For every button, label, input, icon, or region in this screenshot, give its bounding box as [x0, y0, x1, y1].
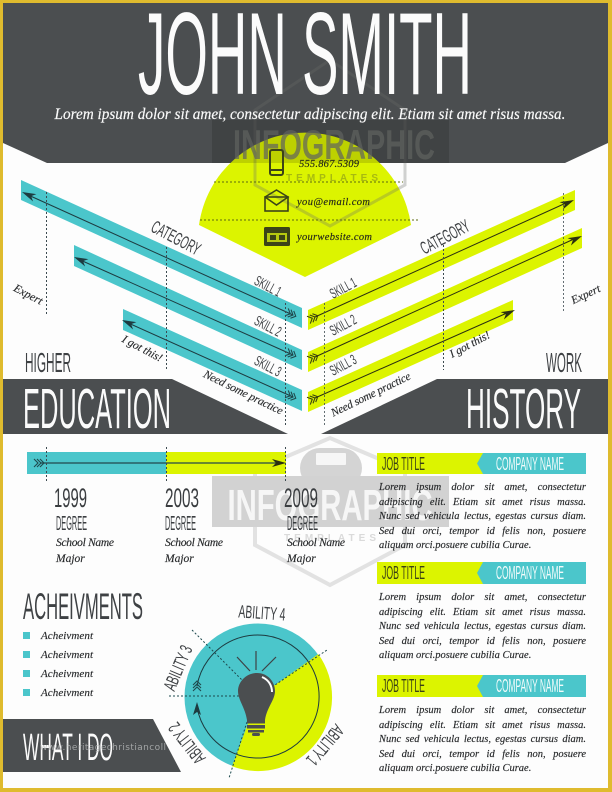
achievements list: Acheivment	[40, 649, 94, 661]
bar: skill 1	[20, 180, 302, 328]
timeline entry: 1999: Major	[55, 553, 85, 565]
timeline entry: 2009: DEGREE	[287, 513, 318, 535]
job description 3: aliquam orci.posuere cubilia Curae.	[379, 763, 531, 774]
timeline entry: 2003	[164, 483, 223, 565]
source url overlay: www.heritagechristiancoll	[40, 743, 166, 753]
label: need some practice: Need some practice	[200, 368, 285, 417]
job description 2: Nunc sed vehicula lectus, egestas cursus diam.	[379, 621, 586, 632]
bar: skill 3	[120, 309, 302, 411]
chart: education skills	[11, 180, 302, 427]
label: ability 4: ABILITY 4	[238, 601, 286, 625]
job description 3: Sed dui orci, tempor id felis non, posuere	[379, 748, 586, 760]
chart: work skills	[307, 190, 603, 425]
band: what i do	[3, 719, 181, 772]
contact details	[200, 150, 418, 246]
job header 2	[377, 562, 586, 584]
header band	[3, 3, 608, 163]
email: you@email.com	[296, 197, 370, 208]
watermark: top	[212, 60, 449, 226]
text: WHAT I DO	[23, 727, 113, 769]
timeline entry: 2009	[284, 483, 345, 565]
job description 1: Nunc sed vehicula lectus, egestas cursus diam.	[379, 511, 586, 522]
job description 3: Lorem ipsum dolor sit amet, consectetur	[379, 705, 586, 716]
job header 1	[377, 453, 586, 474]
achievements list: Acheivment	[40, 630, 94, 642]
label: ability 2: ABILITY 2	[165, 718, 209, 768]
job header 3	[377, 675, 586, 697]
achievements list	[23, 630, 94, 699]
watermark: center: INFOGRAPHIC	[228, 481, 432, 530]
band: history	[321, 379, 608, 434]
label: ability 3: ABILITY 3	[160, 642, 196, 694]
timeline entry: 2003: DEGREE	[165, 513, 196, 535]
tagline: Lorem ipsum dolor sit amet, consectetur adipiscing elit. Etiam sit amet risus massa.	[54, 106, 566, 123]
icon: light bulb	[237, 651, 276, 736]
job description 1: Lorem ipsum dolor sit amet, consectetur	[379, 482, 586, 493]
timeline entry: 1999	[54, 483, 114, 565]
timeline entry: 2003: School Name	[165, 537, 223, 549]
bar: skill 2	[307, 228, 584, 372]
watermark: top: INFOGRAPHIC	[233, 121, 435, 168]
phone number: 555.867.5309	[299, 159, 360, 170]
timeline entry: 1999: DEGREE	[56, 513, 87, 535]
label: i got this: I got this!	[447, 329, 492, 361]
job description 2: aliquam orci.posuere cubilia Curae.	[379, 650, 531, 661]
timeline entry: 1999: School Name	[56, 537, 114, 549]
contact fan	[199, 133, 411, 277]
job description 1: Sed dui orci, tempor id felis non, posuere	[379, 526, 586, 536]
job description 2: adipiscing elit. Etiam sit amet risus massa.	[379, 606, 586, 618]
icon: website	[264, 227, 290, 246]
timeline entry: 2009: School Name	[287, 537, 345, 549]
text: ACHEIVMENTS	[23, 586, 143, 627]
label: skill 2: SKILL 2	[251, 313, 284, 341]
icon: phone	[270, 150, 283, 175]
achievements list: Acheivment	[40, 668, 94, 680]
label: i got this: I got this!	[119, 333, 164, 365]
job description 3: Nunc sed vehicula lectus, egestas cursus diam.	[379, 734, 586, 745]
bar: skill 2	[72, 245, 302, 370]
label: skill 1: SKILL 1	[327, 275, 360, 303]
job description 1	[378, 482, 586, 551]
job description 2: Sed dui orci, tempor id felis non, posuere	[379, 636, 586, 646]
timeline bar	[27, 447, 286, 481]
text: EDUCATION	[23, 377, 171, 441]
label: skill 1: SKILL 1	[251, 273, 284, 301]
job header 3: JOB TITLE	[382, 676, 425, 696]
label: category: CATEGORY	[148, 217, 204, 259]
text: HIGHER	[25, 347, 71, 378]
timeline entry: 2009: Major	[286, 553, 316, 565]
timeline entry: 2003: 2003	[165, 483, 199, 513]
label: skill 3: SKILL 3	[327, 352, 360, 380]
watermark: center: TEMPLATES	[284, 533, 376, 544]
timeline entry: 2009: 2009	[284, 483, 318, 513]
job header 2: JOB TITLE	[382, 563, 425, 583]
achievements list: Acheivment	[40, 687, 94, 699]
bar: skill 1	[307, 190, 576, 330]
website: yourwebsite.com	[296, 232, 372, 243]
timeline entry: 2003: Major	[164, 553, 194, 565]
timeline entry: 1999: 1999	[54, 483, 87, 513]
job description 2	[378, 592, 586, 661]
watermark: top: TEMPLATES	[286, 173, 378, 184]
label: need some practice: Need some practice	[328, 371, 413, 420]
chart: abilities wheel	[160, 601, 348, 778]
job header 1: JOB TITLE	[382, 454, 425, 474]
label: skill 2: SKILL 2	[327, 312, 360, 340]
job description 3: adipiscing elit. Etiam sit amet risus massa.	[379, 720, 586, 730]
band: education	[3, 379, 288, 434]
label: skill 3: SKILL 3	[251, 353, 284, 381]
job description 3	[378, 705, 586, 774]
label: expert: Expert	[569, 283, 603, 307]
watermark: center	[212, 438, 449, 585]
job description 2: Lorem ipsum dolor sit amet, consectetur	[379, 592, 586, 603]
label: expert: Expert	[11, 282, 45, 308]
job description 1: aliquam orci.posuere cubilia Curae.	[379, 540, 531, 551]
job description 1: adipiscing elit. Etiam sit amet risus massa.	[379, 496, 586, 508]
label: category: CATEGORY	[417, 216, 473, 258]
bar: skill 3	[307, 300, 517, 412]
icon: email	[265, 190, 288, 211]
